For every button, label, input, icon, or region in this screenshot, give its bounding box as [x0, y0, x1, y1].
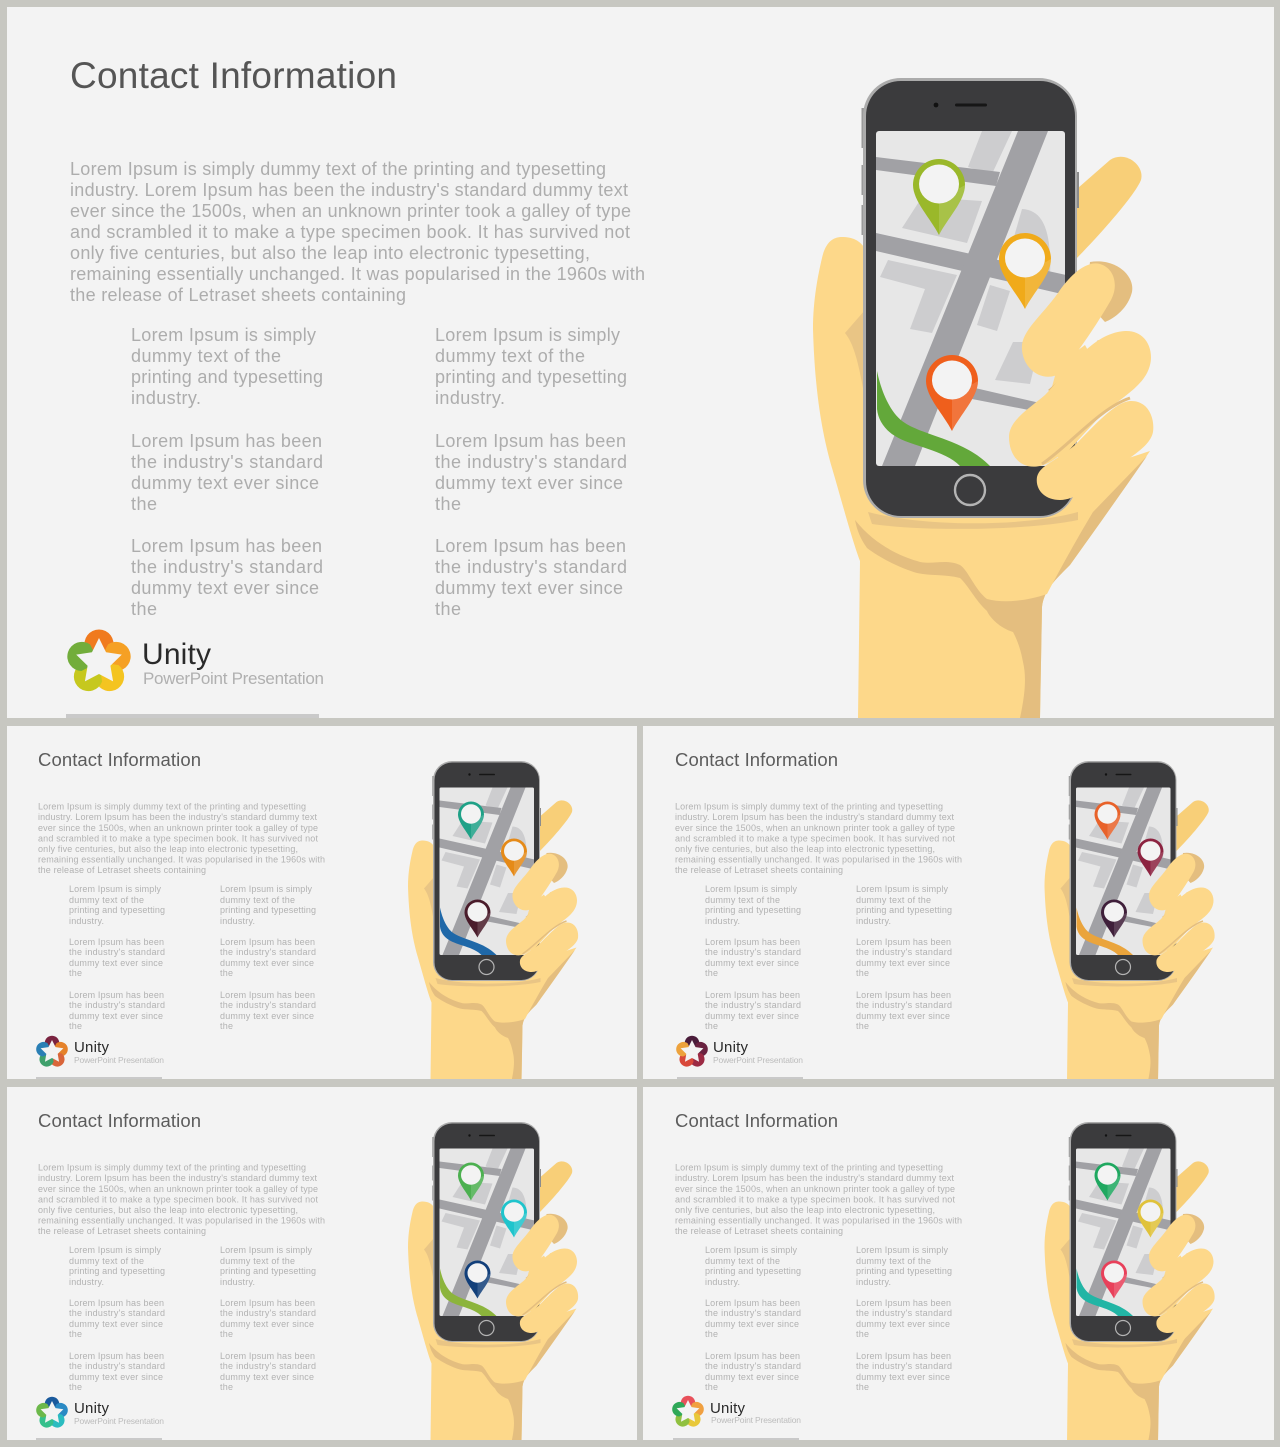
right column text: the industry's standard — [220, 1361, 316, 1371]
logo wordmark: Unity — [74, 1400, 110, 1417]
left column text: the — [69, 1329, 82, 1339]
left column text — [705, 884, 801, 1031]
paragraph text: the release of Letraset sheets containing — [38, 865, 206, 875]
left column text: the — [705, 1329, 718, 1339]
footer bar — [673, 1438, 799, 1440]
logo subtitle: PowerPoint Presentation — [74, 1055, 164, 1065]
right column text: industry. — [220, 916, 255, 926]
paragraph text: only five centuries, but also the leap into electronic typesetting, — [38, 844, 298, 854]
paragraph text: and scrambled it to make a type specimen book. It has survived not — [38, 1194, 318, 1204]
illustration: hand holding phone with map — [1044, 761, 1215, 1081]
right column text — [856, 884, 952, 1031]
left column text: dummy text ever since — [131, 473, 319, 493]
title: Contact Information — [70, 55, 397, 96]
left column text: Lorem Ipsum has been — [131, 536, 322, 556]
hand fingers — [1142, 1214, 1215, 1333]
pin: yellow — [1138, 1200, 1164, 1238]
right column text: dummy text of the — [856, 1256, 931, 1266]
pin: orange — [926, 355, 978, 431]
right column text: the — [220, 968, 233, 978]
right column text: Lorem Ipsum has been — [220, 937, 315, 947]
title: Contact Information — [675, 749, 838, 770]
left column text: the — [131, 599, 157, 619]
pin: pink — [1101, 1260, 1127, 1298]
left column text: dummy text of the — [69, 895, 144, 905]
pin: orange — [501, 838, 527, 876]
left column text: the industry's standard — [69, 1308, 165, 1318]
right column text: industry. — [220, 1277, 255, 1287]
paragraph text: industry. Lorem Ipsum has been the industry's standard dummy text — [38, 1173, 317, 1183]
right column text: the — [220, 1329, 233, 1339]
paragraph text: industry. Lorem Ipsum has been the industry's standard dummy text — [675, 1173, 954, 1183]
left column text: printing and typesetting — [69, 1266, 165, 1276]
left column text: dummy text of the — [705, 895, 780, 905]
logo icon — [674, 1036, 710, 1069]
left column text: Lorem Ipsum has been — [69, 1298, 164, 1308]
left column text: the industry's standard — [131, 452, 323, 472]
paragraph text: Lorem Ipsum is simply dummy text of the printing and typesetting — [38, 802, 306, 812]
left column text: printing and typesetting — [705, 1266, 801, 1276]
pin: navy — [464, 1260, 490, 1298]
right column text: the industry's standard — [856, 1308, 952, 1318]
logo subtitle: PowerPoint Presentation — [74, 1416, 164, 1426]
pin: yellow — [999, 233, 1051, 309]
right column text: dummy text ever since — [220, 1011, 314, 1021]
right column text: dummy text ever since — [435, 578, 623, 598]
left column text: printing and typesetting — [131, 367, 323, 387]
left column text: dummy text ever since — [131, 578, 319, 598]
left column text — [705, 1245, 801, 1392]
left column text: the industry's standard — [69, 947, 165, 957]
left column text: Lorem Ipsum has been — [705, 1351, 800, 1361]
left column text: the — [69, 1382, 82, 1392]
panel: slide variant 4 (green, yellow, pink) — [643, 1087, 1274, 1442]
right column text: industry. — [435, 388, 505, 408]
paragraph text: only five centuries, but also the leap into electronic typesetting, — [675, 844, 935, 854]
left column text: dummy text of the — [131, 346, 281, 366]
right column text: industry. — [856, 916, 891, 926]
left column text: dummy text ever since — [705, 1372, 799, 1382]
right column text: the — [220, 1382, 233, 1392]
left column text: dummy text ever since — [69, 958, 163, 968]
panel: slide variant 3 (green, cyan, navy) — [7, 1087, 637, 1442]
paragraph text: Lorem Ipsum is simply dummy text of the printing and typesetting — [38, 1162, 306, 1172]
right column text: Lorem Ipsum has been — [220, 1298, 315, 1308]
paragraph text: and scrambled it to make a type specimen book. It has survived not — [675, 834, 955, 844]
left column text: Lorem Ipsum has been — [705, 937, 800, 947]
illustration: hand holding phone with map — [408, 1122, 578, 1442]
paragraph text: industry. Lorem Ipsum has been the industry's standard dummy text — [675, 812, 954, 822]
left column text: industry. — [69, 1277, 104, 1287]
hand fingers — [506, 1214, 578, 1333]
paragraph text — [675, 1162, 962, 1236]
paragraph text: remaining essentially unchanged. It was popularised in the 1960s with — [675, 1216, 962, 1226]
left column text: printing and typesetting — [705, 905, 801, 915]
left column text — [69, 884, 165, 1031]
logo icon — [64, 629, 134, 697]
map route — [1076, 908, 1133, 955]
logo subtitle: PowerPoint Presentation — [713, 1055, 803, 1065]
logo subtitle: PowerPoint Presentation — [711, 1415, 801, 1425]
logo wordmark: Unity — [74, 1039, 110, 1056]
right column text: the — [856, 1329, 869, 1339]
left column text: the industry's standard — [69, 1361, 165, 1371]
right column text: dummy text ever since — [856, 1011, 950, 1021]
left column text: industry. — [705, 1277, 740, 1287]
left column text: Lorem Ipsum is simply — [705, 1245, 798, 1255]
hand fingers — [1009, 261, 1153, 500]
right column text: the industry's standard — [220, 1308, 316, 1318]
map route — [440, 1268, 496, 1316]
right column text: printing and typesetting — [220, 905, 316, 915]
paragraph text: Lorem Ipsum is simply dummy text of the printing and typesetting — [675, 802, 943, 812]
title: Contact Information — [38, 749, 201, 770]
illustration: hand holding phone with map — [1044, 1122, 1215, 1442]
right column text: the industry's standard — [435, 452, 627, 472]
left column text: dummy text ever since — [705, 958, 799, 968]
map route — [1076, 1268, 1133, 1316]
paragraph text — [70, 159, 645, 305]
left column text: the industry's standard — [69, 1000, 165, 1010]
paragraph text: industry. Lorem Ipsum has been the industry's standard dummy text — [70, 180, 628, 200]
right column text: the industry's standard — [856, 1000, 952, 1010]
paragraph text: the release of Letraset sheets containing — [675, 865, 843, 875]
map route — [440, 908, 496, 955]
paragraph text: remaining essentially unchanged. It was popularised in the 1960s with — [38, 1216, 325, 1226]
logo wordmark: Unity — [142, 638, 211, 671]
left column text: printing and typesetting — [69, 905, 165, 915]
right column text: the — [435, 494, 461, 514]
right column text — [220, 884, 316, 1031]
paragraph text: the release of Letraset sheets containing — [70, 285, 406, 305]
pin: green — [1094, 1162, 1120, 1200]
paragraph text: only five centuries, but also the leap into electronic typesetting, — [38, 1205, 298, 1215]
paragraph text: remaining essentially unchanged. It was popularised in the 1960s with — [38, 854, 325, 864]
left column text: dummy text of the — [705, 1256, 780, 1266]
logo icon — [34, 1036, 70, 1069]
logo icon — [670, 1396, 706, 1429]
paragraph text: industry. Lorem Ipsum has been the industry's standard dummy text — [38, 812, 317, 822]
right column text: dummy text of the — [856, 895, 931, 905]
panel: slide variant 1 (teal, orange, maroon) — [7, 726, 637, 1081]
paragraph text: ever since the 1500s, when an unknown printer took a galley of type — [70, 201, 631, 221]
paragraph text: only five centuries, but also the leap into electronic typesetting, — [70, 243, 590, 263]
left column text: the — [69, 1021, 82, 1031]
left column text: Lorem Ipsum has been — [131, 431, 322, 451]
pin: green — [458, 1162, 484, 1200]
right column text: Lorem Ipsum has been — [856, 1351, 951, 1361]
title: Contact Information — [675, 1110, 838, 1131]
right column text: Lorem Ipsum has been — [220, 1351, 315, 1361]
right column text: dummy text ever since — [856, 1319, 950, 1329]
left column text: the — [705, 968, 718, 978]
left column text: Lorem Ipsum has been — [69, 1351, 164, 1361]
left column text: the industry's standard — [705, 1308, 801, 1318]
paragraph text: remaining essentially unchanged. It was popularised in the 1960s with — [70, 264, 645, 284]
right column text — [856, 1245, 952, 1392]
footer bar — [36, 1438, 162, 1440]
paragraph text: ever since the 1500s, when an unknown printer took a galley of type — [675, 823, 955, 833]
hand fingers — [1142, 853, 1215, 972]
pin: teal — [458, 802, 484, 840]
left column text: dummy text ever since — [69, 1319, 163, 1329]
right column text: dummy text ever since — [856, 1372, 950, 1382]
right column text: dummy text ever since — [435, 473, 623, 493]
left column text: dummy text of the — [69, 1256, 144, 1266]
right column text: Lorem Ipsum is simply — [435, 325, 620, 345]
left column text — [131, 325, 323, 619]
illustration: hand holding phone with map — [813, 78, 1153, 718]
paragraph text: Lorem Ipsum is simply dummy text of the printing and typesetting — [675, 1162, 943, 1172]
right column text: the industry's standard — [435, 557, 627, 577]
right column text: printing and typesetting — [435, 367, 627, 387]
logo subtitle: PowerPoint Presentation — [143, 669, 324, 688]
left column text: dummy text ever since — [69, 1011, 163, 1021]
left column text: industry. — [705, 916, 740, 926]
right column text: Lorem Ipsum has been — [435, 431, 626, 451]
left column text: the industry's standard — [705, 1000, 801, 1010]
right column text: dummy text ever since — [220, 958, 314, 968]
right column text: Lorem Ipsum has been — [856, 937, 951, 947]
right column text: the — [220, 1021, 233, 1031]
right column text: dummy text ever since — [220, 1372, 314, 1382]
right column text — [435, 325, 627, 619]
right column text: dummy text ever since — [220, 1319, 314, 1329]
left column text: Lorem Ipsum is simply — [69, 884, 162, 894]
right column text: Lorem Ipsum is simply — [856, 1245, 948, 1255]
paragraph text: ever since the 1500s, when an unknown printer took a galley of type — [38, 1184, 318, 1194]
paragraph text: Lorem Ipsum is simply dummy text of the printing and typesetting — [70, 159, 606, 179]
logo wordmark: Unity — [710, 1400, 746, 1417]
right column text: Lorem Ipsum has been — [220, 990, 315, 1000]
paragraph text: ever since the 1500s, when an unknown printer took a galley of type — [38, 823, 318, 833]
paragraph text: remaining essentially unchanged. It was popularised in the 1960s with — [675, 854, 962, 864]
left column text: dummy text ever since — [69, 1372, 163, 1382]
left column text: Lorem Ipsum is simply — [69, 1245, 162, 1255]
right column text: printing and typesetting — [856, 905, 952, 915]
paragraph text: ever since the 1500s, when an unknown printer took a galley of type — [675, 1184, 955, 1194]
map route — [877, 371, 990, 466]
right column text — [220, 1245, 316, 1392]
right column text: dummy text ever since — [856, 958, 950, 968]
illustration: hand holding phone with map — [408, 761, 578, 1081]
left column text: the — [69, 968, 82, 978]
right column text: the — [435, 599, 461, 619]
pin: maroon — [464, 900, 490, 938]
left column text: Lorem Ipsum has been — [705, 1298, 800, 1308]
left column text: Lorem Ipsum has been — [69, 937, 164, 947]
right column text: industry. — [856, 1277, 891, 1287]
left column text: industry. — [131, 388, 201, 408]
panel: main slide — [7, 7, 1274, 718]
left column text: the — [131, 494, 157, 514]
left column text: Lorem Ipsum has been — [705, 990, 800, 1000]
paragraph text — [38, 1162, 325, 1236]
left column text: the industry's standard — [705, 947, 801, 957]
right column text: the industry's standard — [856, 1361, 952, 1371]
pin: cyan — [501, 1200, 527, 1238]
right column text: Lorem Ipsum is simply — [220, 1245, 312, 1255]
pin: red orange — [1094, 802, 1120, 840]
left column text: industry. — [69, 916, 104, 926]
pin: maroon — [1138, 838, 1164, 876]
right column text: Lorem Ipsum has been — [856, 1298, 951, 1308]
footer bar — [66, 714, 319, 718]
left column text: the — [705, 1382, 718, 1392]
hand fingers — [506, 853, 578, 972]
paragraph text: the release of Letraset sheets containing — [38, 1226, 206, 1236]
right column text: the industry's standard — [220, 1000, 316, 1010]
paragraph text: only five centuries, but also the leap into electronic typesetting, — [675, 1205, 935, 1215]
logo icon — [34, 1397, 70, 1430]
footer bar — [36, 1077, 162, 1079]
right column text: printing and typesetting — [220, 1266, 316, 1276]
right column text: printing and typesetting — [856, 1266, 952, 1276]
right column text: dummy text of the — [435, 346, 585, 366]
right column text: the industry's standard — [856, 947, 952, 957]
right column text: the — [856, 1021, 869, 1031]
left column text: the — [705, 1021, 718, 1031]
right column text: Lorem Ipsum has been — [435, 536, 626, 556]
right column text: dummy text of the — [220, 1256, 295, 1266]
left column text: dummy text ever since — [705, 1011, 799, 1021]
left column text — [69, 1245, 165, 1392]
paragraph text: and scrambled it to make a type specimen book. It has survived not — [38, 834, 318, 844]
left column text: the industry's standard — [131, 557, 323, 577]
left column text: Lorem Ipsum is simply — [705, 884, 798, 894]
right column text: dummy text of the — [220, 895, 295, 905]
paragraph text — [38, 802, 325, 875]
left column text: dummy text ever since — [705, 1319, 799, 1329]
right column text: the — [856, 968, 869, 978]
paragraph text — [675, 802, 962, 875]
panel: slide variant 2 (red, maroon, dark) — [643, 726, 1274, 1081]
right column text: Lorem Ipsum has been — [856, 990, 951, 1000]
right column text: Lorem Ipsum is simply — [220, 884, 312, 894]
logo wordmark: Unity — [713, 1039, 748, 1056]
left column text: Lorem Ipsum has been — [69, 990, 164, 1000]
paragraph text: the release of Letraset sheets containing — [675, 1226, 843, 1236]
left column text: the industry's standard — [705, 1361, 801, 1371]
paragraph text: and scrambled it to make a type specimen book. It has survived not — [675, 1194, 955, 1204]
footer bar — [677, 1077, 803, 1079]
right column text: the industry's standard — [220, 947, 316, 957]
left column text: Lorem Ipsum is simply — [131, 325, 316, 345]
pin: dark plum — [1101, 900, 1127, 938]
right column text: the — [856, 1382, 869, 1392]
title: Contact Information — [38, 1110, 201, 1131]
pin: green — [913, 159, 965, 235]
paragraph text: and scrambled it to make a type specimen book. It has survived not — [70, 222, 630, 242]
right column text: Lorem Ipsum is simply — [856, 884, 948, 894]
